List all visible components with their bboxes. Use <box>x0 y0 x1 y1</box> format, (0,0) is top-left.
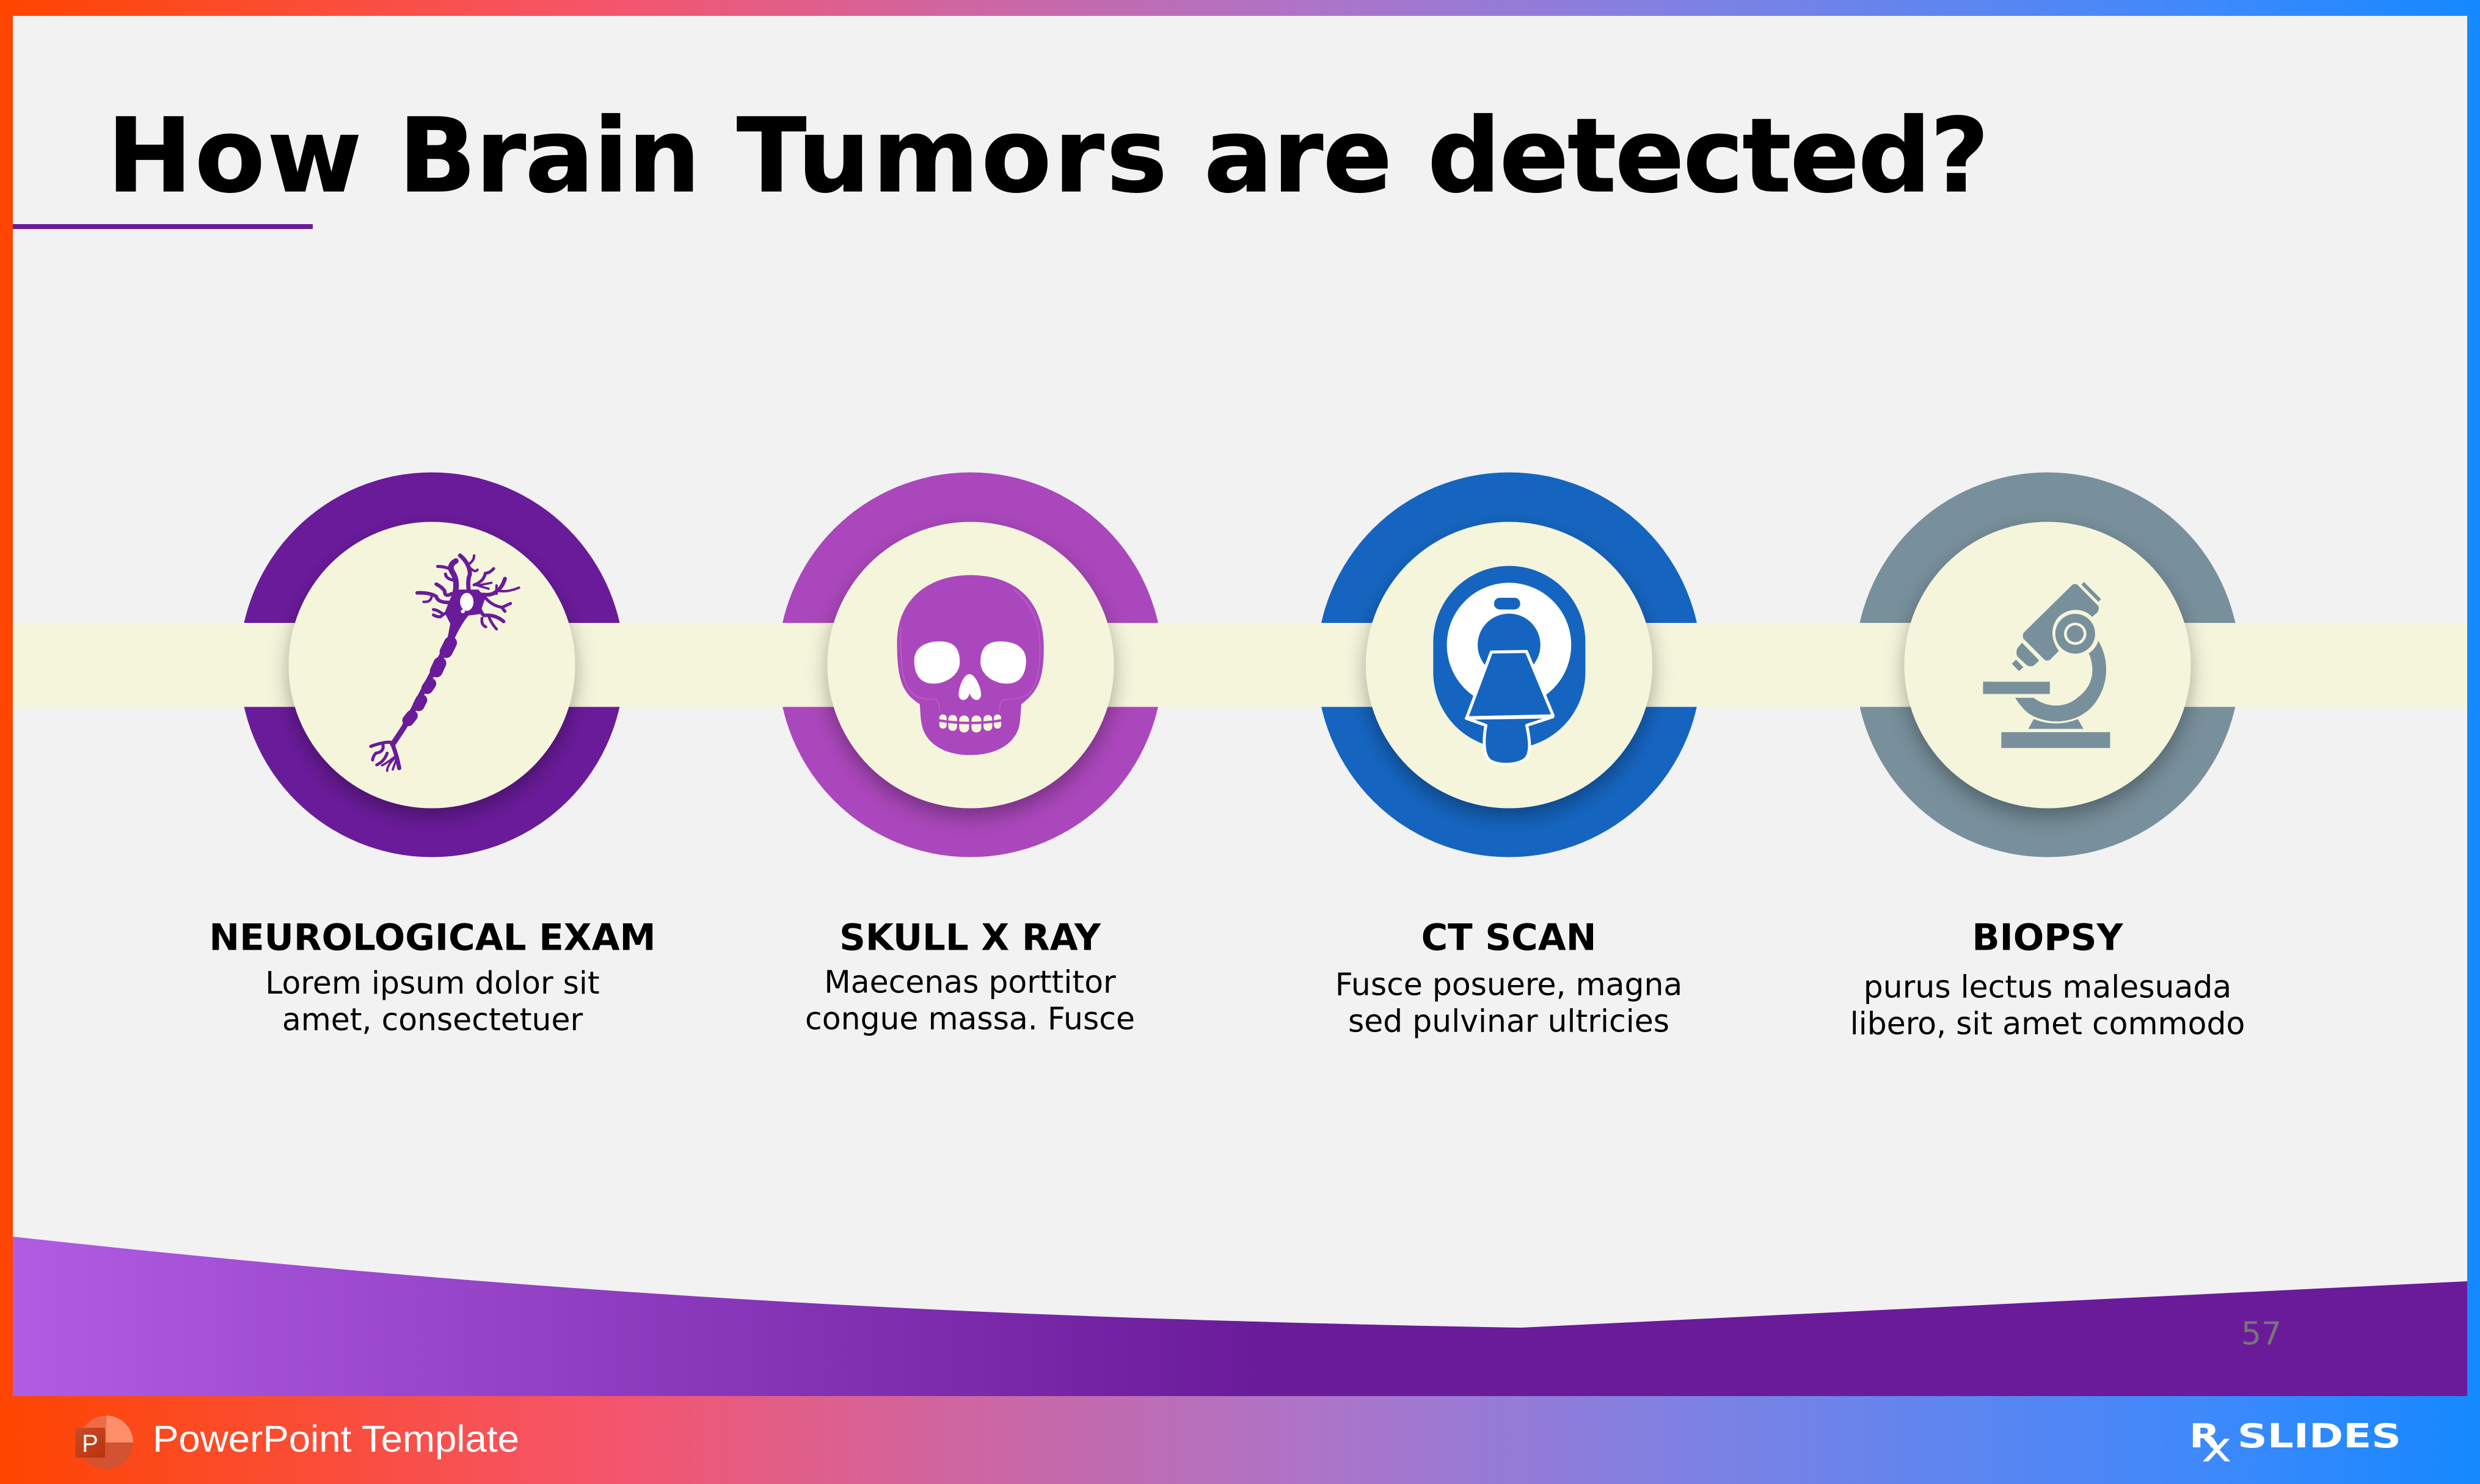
step 4: biopsy <box>1850 473 2245 1041</box>
icon: ct scanner <box>1433 566 1585 764</box>
description: biopsy: libero, sit amet commodo <box>1850 1005 2245 1041</box>
bottom wave <box>13 1237 2467 1396</box>
heading: skull x ray: SKULL X RAY <box>839 917 1101 959</box>
description: biopsy: purus lectus malesuada <box>1864 969 2231 1005</box>
title: are <box>1204 96 1428 216</box>
title: Brain <box>398 96 734 216</box>
ring: skull x ray <box>778 473 1163 857</box>
inner disc <box>1366 522 1652 809</box>
icon: powerpoint logo <box>75 1416 133 1469</box>
logo: rx slides <box>2189 1417 2401 1472</box>
step 1: neurological exam <box>209 473 656 1038</box>
logo: rx slides: SLIDES <box>2237 1417 2401 1455</box>
step 2: skull x ray <box>778 473 1163 1037</box>
description: ct scan: sed pulvinar ultricies <box>1348 1003 1669 1039</box>
inner disc <box>1905 522 2190 809</box>
description: skull x ray: congue massa. Fusce <box>805 1000 1135 1037</box>
footer label: PowerPoint Template <box>153 1418 519 1460</box>
heading: biopsy: BIOPSY <box>1972 917 2124 959</box>
heading: neurological exam: NEUROLOGICAL EXAM <box>209 917 656 959</box>
title: detected? <box>1428 96 1988 216</box>
title: Tumors <box>737 96 1208 216</box>
ring: biopsy <box>1855 473 2240 857</box>
title underline <box>13 224 313 229</box>
icon: powerpoint logo: P <box>82 1430 98 1457</box>
logo: rx slides: R <box>2189 1417 2220 1455</box>
horizontal band <box>13 623 2467 707</box>
description: ct scan: Fusce posuere, magna <box>1335 966 1682 1002</box>
description: neurological exam: amet, consectetuer <box>282 1002 583 1038</box>
inner disc <box>827 522 1114 809</box>
logo: rx slides: x <box>2201 1424 2232 1472</box>
ring: ct scan <box>1317 473 1702 857</box>
ring: neurological exam <box>239 473 624 857</box>
description: skull x ray: Maecenas porttitor <box>824 964 1116 1000</box>
description: neurological exam: Lorem ipsum dolor sit <box>265 965 600 1001</box>
icon: microscope <box>1983 582 2110 748</box>
title: How <box>107 96 402 216</box>
icon: skull <box>897 575 1044 755</box>
icon: neuron <box>371 556 519 771</box>
heading: ct scan: CT SCAN <box>1421 917 1596 959</box>
slide number: 57 <box>2241 1315 2281 1352</box>
step 3: ct scan <box>1317 473 1702 1039</box>
inner disc <box>288 522 575 809</box>
